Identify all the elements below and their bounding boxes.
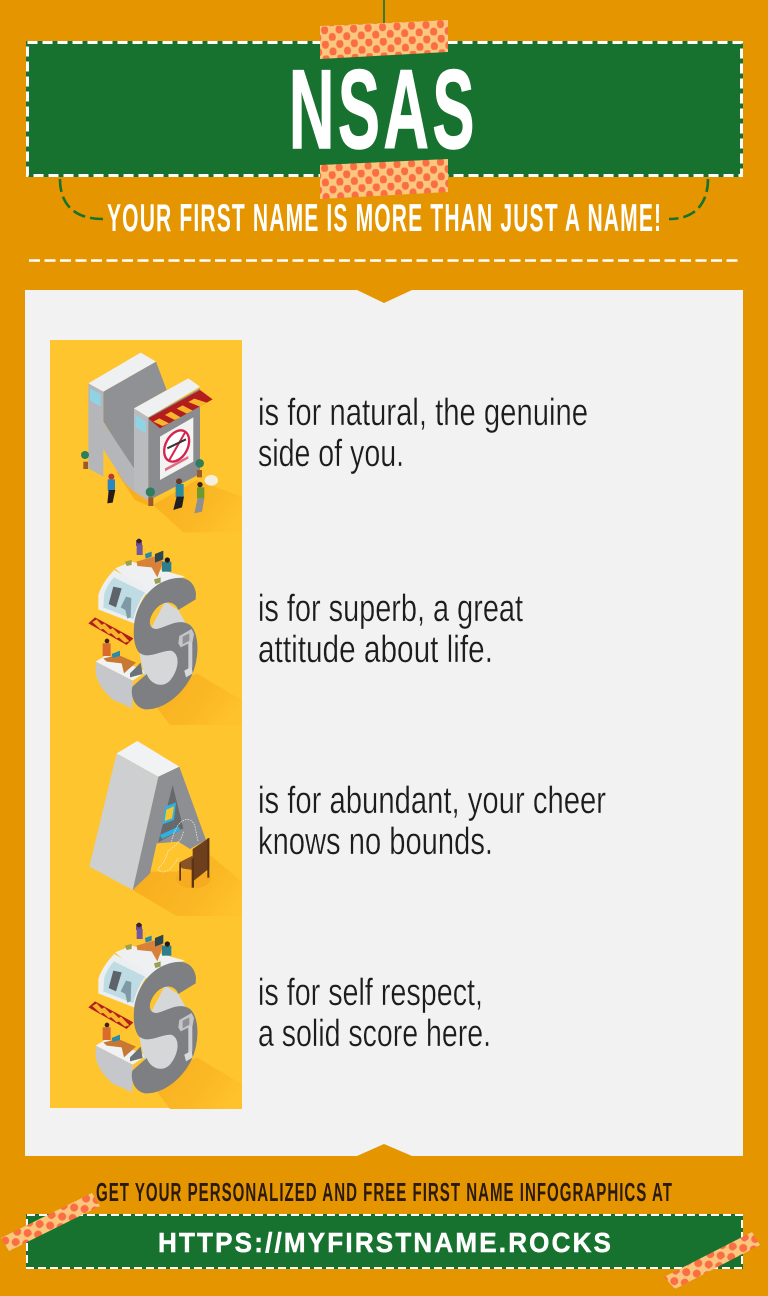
text: A bbox=[258, 780, 606, 863]
text: S: is for superb, a great bbox=[258, 588, 523, 630]
content panel bbox=[25, 290, 743, 1156]
image strip bbox=[50, 340, 242, 1108]
text: A: knows no bounds. bbox=[258, 821, 493, 863]
hanging string bbox=[383, 0, 385, 24]
icon: letter S building repeat bbox=[88, 923, 242, 1109]
tape left bbox=[1, 1193, 100, 1251]
icon: letter A building bbox=[89, 741, 242, 916]
footer url banner bbox=[26, 1214, 743, 1269]
curly connector left bbox=[60, 179, 103, 219]
text: S repeat: a solid score here. bbox=[258, 1013, 491, 1055]
footer url: HTTPS://MYFIRSTNAME.ROCKS bbox=[158, 1227, 611, 1258]
subtitle: YOUR FIRST NAME IS MORE THAN JUST A NAME! bbox=[107, 196, 661, 240]
title: NSAS bbox=[289, 48, 474, 173]
text: S bbox=[258, 588, 523, 671]
text: S repeat bbox=[258, 972, 491, 1055]
tape top bbox=[320, 20, 448, 59]
text: S: attitude about life. bbox=[258, 629, 493, 671]
text: N: is for natural, the genuine bbox=[258, 392, 588, 434]
tape bottom bbox=[320, 159, 448, 199]
title banner bbox=[26, 41, 743, 177]
icon: letter S building bbox=[88, 539, 242, 725]
footer call to action: GET YOUR PERSONALIZED AND FREE FIRST NAME INFOGRAPHICS AT bbox=[96, 1178, 672, 1207]
text: N bbox=[258, 392, 588, 475]
curly connector right bbox=[669, 179, 708, 219]
icon: letter N building bbox=[81, 353, 242, 532]
text: A: is for abundant, your cheer bbox=[258, 780, 606, 822]
text: S repeat: is for self respect, bbox=[258, 972, 483, 1014]
text: N: side of you. bbox=[258, 433, 404, 475]
tape right bbox=[664, 1232, 760, 1289]
